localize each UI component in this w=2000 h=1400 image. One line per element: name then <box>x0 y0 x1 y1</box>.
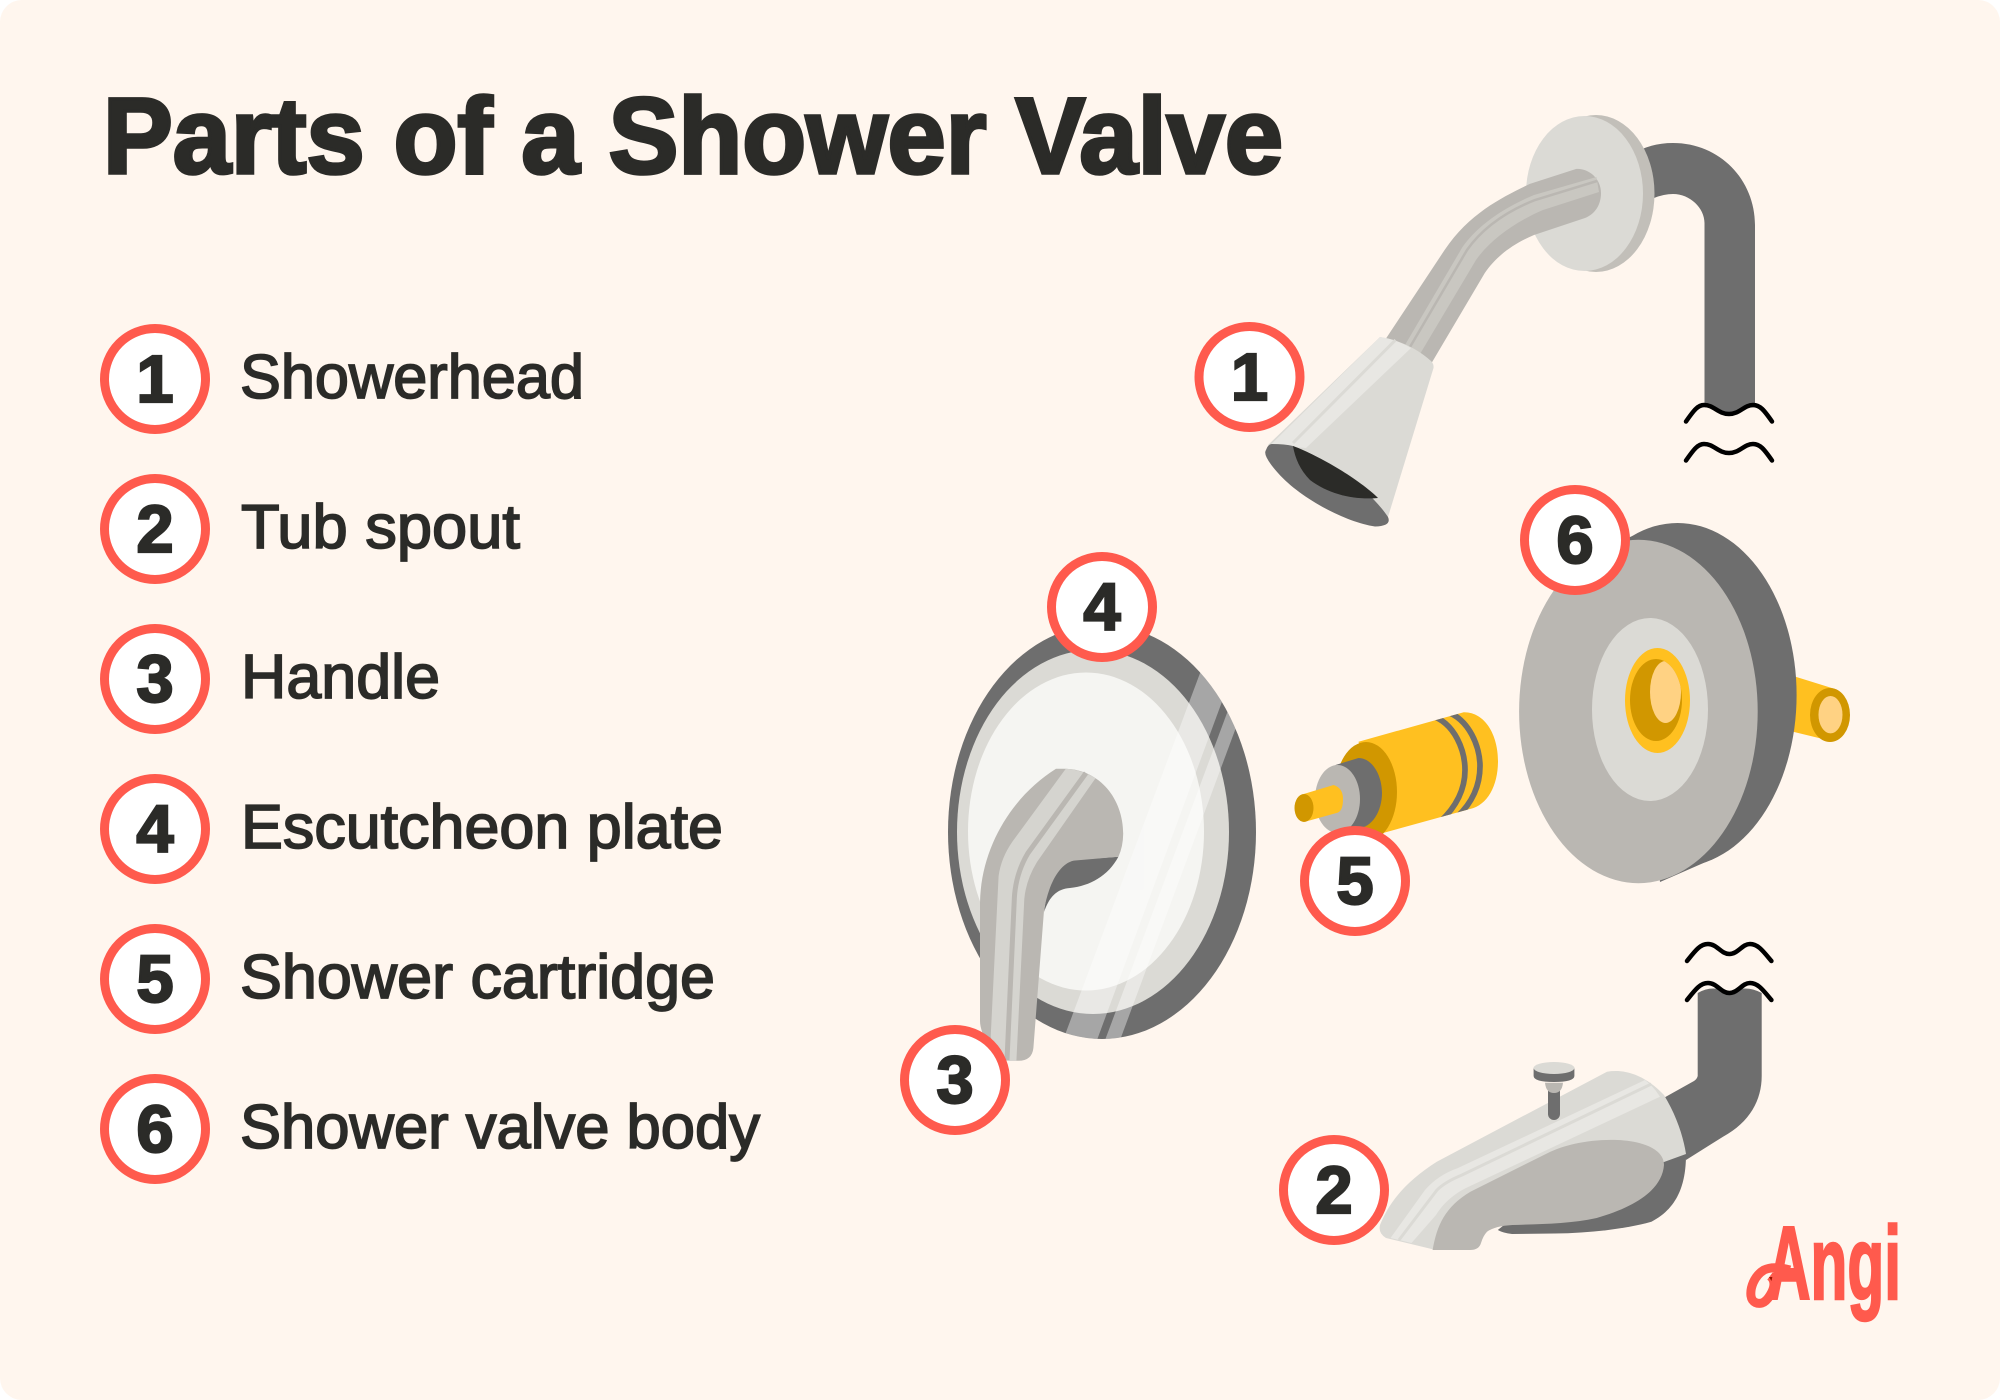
plate outer rim <box>948 625 1256 1039</box>
illustration: handle <box>980 769 1123 1061</box>
legend item 6: shower valve body: Shower valve body <box>240 1093 760 1162</box>
shower cone <box>1268 337 1434 517</box>
illustration: escutcheon plate <box>948 635 1256 1039</box>
callout 1: 1 <box>1231 340 1268 415</box>
callout 3: 3 <box>936 1043 974 1118</box>
callout 4: 4 <box>1083 570 1121 645</box>
diverter neck <box>1545 1083 1563 1093</box>
spout body <box>1380 1071 1686 1250</box>
valve hub <box>1592 618 1708 801</box>
logo wordmark: Angi <box>1767 1206 1901 1322</box>
cartridge seat <box>1315 765 1360 833</box>
callout 3 <box>904 1030 1006 1130</box>
illustration: shower cartridge <box>1294 711 1498 842</box>
handle highlight line <box>1007 773 1086 1060</box>
spout underside <box>1498 1150 1686 1234</box>
shower face opening <box>1293 446 1378 498</box>
handle highlight band <box>991 769 1096 1061</box>
logo accent <box>1769 1277 1778 1290</box>
handle lever <box>980 769 1123 1061</box>
logo swash <box>1751 1268 1790 1303</box>
callout 4 <box>1052 556 1152 658</box>
handle underside <box>1044 857 1118 912</box>
illustration: tub spout <box>1380 944 1771 1250</box>
spout highlight line <box>1399 1084 1651 1240</box>
title: Parts of a Shower Valve <box>103 75 1283 196</box>
legend item 1: showerhead: Showerhead <box>240 343 584 412</box>
cartridge o-rings <box>1435 714 1483 818</box>
cartridge pin <box>1304 785 1343 822</box>
legend item 3: handle <box>104 628 440 730</box>
callout 5: 5 <box>1336 844 1374 919</box>
plate face <box>957 650 1229 1014</box>
legend item 2: tub spout: 2 <box>136 492 174 567</box>
shower face <box>1265 444 1389 526</box>
logo: Angi <box>1751 1206 1901 1322</box>
spout highlight band <box>1390 1080 1660 1243</box>
callout 2: 2 <box>1315 1153 1353 1228</box>
wall flange <box>1526 115 1654 272</box>
cartridge collar <box>1336 758 1382 832</box>
legend item 4: escutcheon plate <box>104 778 723 880</box>
legend item 3: handle: Handle <box>241 643 440 712</box>
valve port ring <box>1625 648 1690 753</box>
valve body side <box>1559 523 1797 882</box>
plate glare bands <box>1066 672 1236 1039</box>
valve port bore <box>1630 659 1682 741</box>
diverter stem <box>1548 1085 1560 1120</box>
legend item 3: handle: 3 <box>136 642 174 717</box>
legend item 6: shower valve body: 6 <box>136 1092 174 1167</box>
legend list <box>104 328 760 1180</box>
callout 6 <box>1524 490 1626 590</box>
valve body face <box>1519 540 1758 883</box>
shower arm <box>1385 169 1601 365</box>
illustration: shower valve body <box>1519 523 1850 883</box>
lower pipe break marks <box>1687 944 1771 1000</box>
valve outlet stub <box>1790 675 1850 742</box>
legend item 5: shower cartridge <box>104 928 715 1030</box>
lower supply pipe <box>1660 988 1762 1160</box>
legend item 1: showerhead <box>104 328 584 430</box>
callout 5 <box>1304 830 1406 932</box>
callout 2 <box>1284 1140 1384 1240</box>
valve port light <box>1650 661 1681 723</box>
legend item 4: escutcheon plate: Escutcheon plate <box>241 793 723 862</box>
legend item 2: tub spout: Tub spout <box>241 493 520 562</box>
callout 1 <box>1199 326 1300 428</box>
cartridge shoulder <box>1335 742 1397 842</box>
pipe break marks <box>1686 405 1772 460</box>
legend item 5: shower cartridge: Shower cartridge <box>240 943 715 1012</box>
diverter cap <box>1534 1062 1574 1082</box>
cartridge pin tip <box>1294 794 1314 822</box>
upper supply pipe <box>1640 143 1755 415</box>
legend item 2: tub spout <box>104 478 520 580</box>
plate inner disc <box>968 672 1204 990</box>
legend item 4: escutcheon plate: 4 <box>136 792 174 867</box>
spout lower shade <box>1433 1140 1664 1250</box>
illustration: showerhead assembly <box>1265 115 1772 526</box>
legend item 5: shower cartridge: 5 <box>136 942 174 1017</box>
callout 6: 6 <box>1556 503 1594 578</box>
legend item 6: shower valve body <box>104 1078 760 1180</box>
legend item 1: showerhead: 1 <box>136 342 174 417</box>
cartridge barrel <box>1358 712 1498 833</box>
